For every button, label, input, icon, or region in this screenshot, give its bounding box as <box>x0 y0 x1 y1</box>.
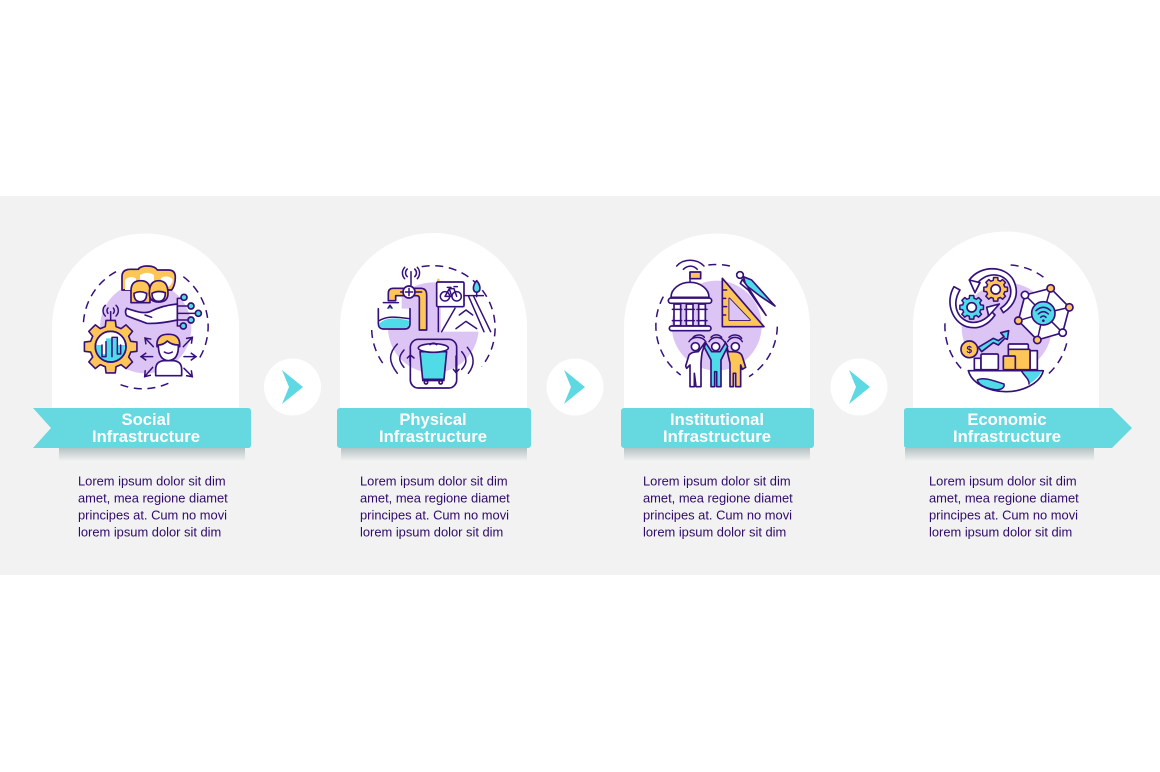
heading: Economic <box>967 410 1047 429</box>
icon: gears, network, growth and globe: $ <box>967 345 973 356</box>
body text: amet, mea regione diamet <box>643 490 793 506</box>
ribbon shadow <box>905 448 1094 461</box>
body text: amet, mea regione diamet <box>78 490 228 506</box>
body text: Lorem ipsum dolor sit dim <box>78 474 226 488</box>
icon: gears, network, growth and globe <box>945 265 1073 392</box>
ribbon <box>904 408 1132 448</box>
ribbon <box>621 408 814 448</box>
panel: social infrastructure <box>33 234 251 540</box>
body text: principes at. Cum no movi <box>929 508 1078 522</box>
icon: people, hand and gear <box>83 266 208 389</box>
ribbon <box>337 408 531 448</box>
body text: amet, mea regione diamet <box>360 490 510 506</box>
arrow: step 2 to 3 <box>546 358 604 416</box>
panel: institutional infrastructure <box>621 234 814 540</box>
panel: economic infrastructure <box>904 232 1132 540</box>
white arch card <box>624 234 810 420</box>
ribbon shadow <box>59 448 245 461</box>
white arch card <box>52 234 239 420</box>
body text: lorem ipsum dolor sit dim <box>643 524 786 540</box>
background band <box>0 196 1160 575</box>
body text: Lorem ipsum dolor sit dim <box>929 474 1077 488</box>
white arch card <box>913 232 1099 420</box>
body text: principes at. Cum no movi <box>360 508 509 522</box>
body text: principes at. Cum no movi <box>643 508 792 522</box>
body text: Lorem ipsum dolor sit dim <box>360 474 508 488</box>
arrow: step 3 to 4 <box>830 358 888 416</box>
icon: tap, road sign and waste bin <box>372 266 495 388</box>
heading: Infrastructure <box>663 427 771 446</box>
body text: lorem ipsum dolor sit dim <box>929 524 1072 540</box>
heading: Infrastructure <box>953 427 1061 446</box>
ribbon <box>33 408 251 448</box>
ribbon shadow <box>341 448 527 461</box>
body text: Lorem ipsum dolor sit dim <box>643 474 791 488</box>
panel: physical infrastructure <box>337 233 531 540</box>
body text: principes at. Cum no movi <box>78 508 227 522</box>
icon: building, set square and people <box>656 260 777 387</box>
body text: lorem ipsum dolor sit dim <box>78 524 221 540</box>
heading: Infrastructure <box>92 427 200 446</box>
heading: Social <box>122 410 170 429</box>
arrow: step 1 to 2 <box>264 358 321 416</box>
white arch card <box>340 233 527 420</box>
body text: amet, mea regione diamet <box>929 490 1079 506</box>
heading: Infrastructure <box>379 427 487 446</box>
ribbon shadow <box>624 448 810 461</box>
body text: lorem ipsum dolor sit dim <box>360 524 503 540</box>
heading: Physical <box>399 410 467 429</box>
heading: Institutional <box>670 410 764 429</box>
